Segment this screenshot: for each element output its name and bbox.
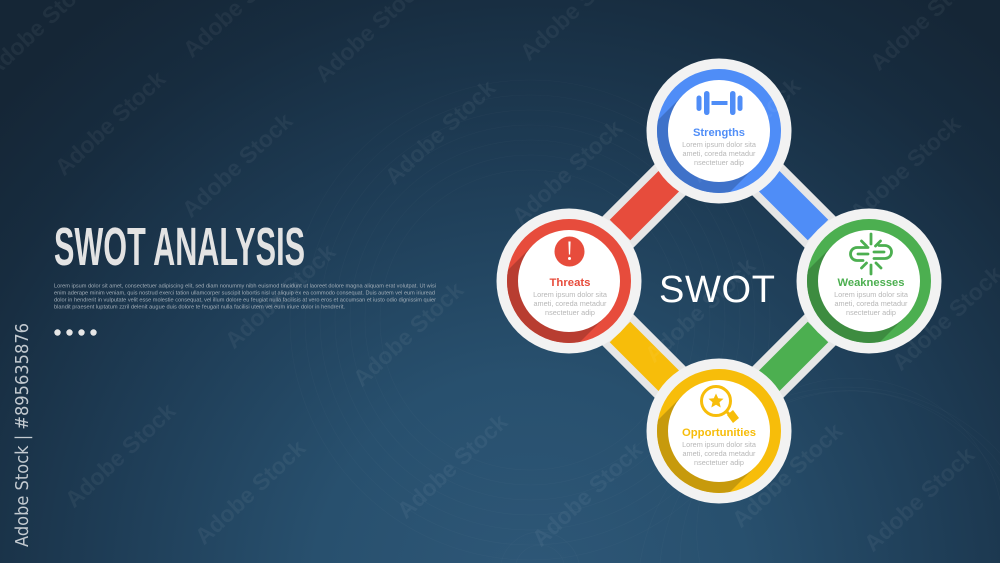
text: Strengths description: [682, 140, 757, 167]
label: Weaknesses: Weaknesses: [838, 277, 904, 289]
text: Weaknesses description: nsectetuer adip: [846, 308, 896, 317]
stock watermarks: Adobe Stock: [177, 107, 297, 222]
circle: Strengths: [646, 58, 792, 204]
text: Opportunities description: Lorem ipsum dolor sita: [682, 440, 757, 449]
text: Opportunities description: [682, 440, 757, 467]
text: Opportunities description: nsectetuer adip: [694, 458, 744, 467]
text: Strengths description: ameti, coreda metadur: [682, 149, 756, 158]
circle: Threats: [496, 208, 642, 354]
text: Strengths description: Lorem ipsum dolor sita: [682, 140, 757, 149]
text: Weaknesses description: ameti, coreda metadur: [834, 299, 908, 308]
text: Opportunities description: ameti, coreda metadur: [682, 449, 756, 458]
pagination dots: [54, 329, 97, 336]
stock watermarks: Adobe Stock: [348, 276, 468, 391]
text: Threats description: [533, 290, 608, 317]
text: Threats description: ameti, coreda metadur: [533, 299, 607, 308]
stock watermarks: Adobe Stock: [685, 72, 805, 187]
icon: exclamation: [554, 236, 584, 266]
text: Weaknesses description: Lorem ipsum dolor sita: [834, 290, 909, 299]
circle: Opportunities: [646, 358, 792, 504]
stock watermarks: Adobe Stock: [60, 397, 180, 512]
text: Strengths description: nsectetuer adip: [694, 158, 744, 167]
text: Weaknesses description: [834, 290, 909, 317]
description text: blandit praesent luptatum zzril delenit augue duis dolore te feugait nulla facilisi utem vel eum iriure dolor in hendrerit.: [54, 304, 345, 310]
side stock id: Adobe Stock | #895635876: [12, 323, 33, 547]
label: Opportunities: Opportunities: [682, 427, 756, 439]
title: SWOT ANALYSIS: [54, 217, 305, 277]
stock watermarks: Adobe Stock: [845, 110, 965, 225]
stock watermarks: Adobe Stock: [392, 408, 512, 523]
stock watermarks: Adobe Stock: [507, 114, 627, 229]
description text: Lorem ipsum dolor sit amet, consectetuer adipiscing elit, sed diam nonummy nibh euismod tincidunt ut laoreet dolore magna aliquam erat volutpat. Ut wisi: [54, 284, 436, 290]
stock watermarks: Adobe Stock: [727, 417, 847, 532]
label: Strengths: Strengths: [693, 127, 745, 139]
stock watermarks: Adobe Stock: [380, 74, 500, 189]
stock watermarks: Adobe Stock: [859, 441, 979, 556]
circle: Weaknesses: [796, 208, 942, 354]
icon: magnifier with star: [702, 386, 739, 423]
center label SWOT: SWOT: [659, 269, 775, 311]
label: Threats: Threats: [550, 277, 590, 289]
icon: broken chain: [851, 234, 892, 274]
stock watermarks: Adobe Stock: [190, 434, 310, 549]
stock watermarks: Adobe Stock: [50, 65, 170, 180]
stock watermarks: Adobe Stock: [220, 238, 340, 353]
description text: [54, 284, 436, 310]
stock watermarks: Adobe Stock: [527, 436, 647, 551]
description text: enim aderape minim veniam, quis nostrud exerci tation ullamcorper suscipit lobortis nisl ut aliquip ex ea commodo consequat. Duis autem vel eum iriuread: [54, 290, 435, 296]
text: Threats description: nsectetuer adip: [545, 308, 595, 317]
connector bands: [569, 131, 869, 431]
text: Threats description: Lorem ipsum dolor sita: [533, 290, 608, 299]
description text: dolor in hendrerit in vulputate velit esse molestie consequat, vel illum dolore eu feugiat nulla facilisis at vero eros et accumsan et iusto odio dignissim quier: [54, 298, 436, 304]
stock watermarks: Adobe Stock: [640, 252, 760, 367]
icon: dumbbell: [696, 91, 742, 115]
